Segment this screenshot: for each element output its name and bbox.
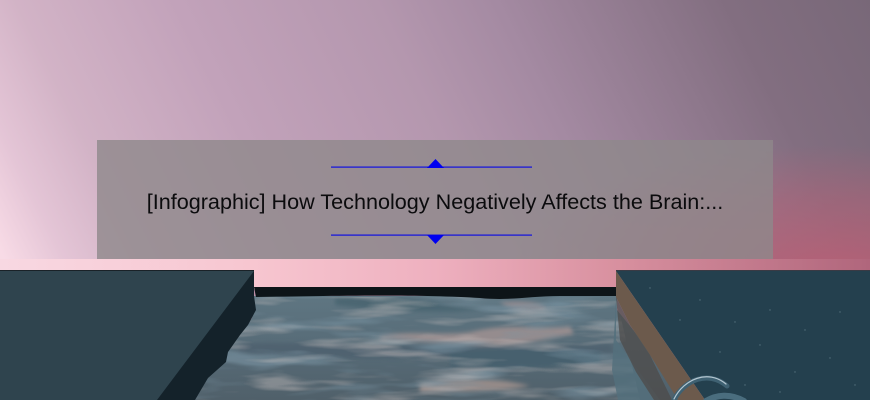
title: [Infographic] How Technology Negatively Affects the Brain:... [147, 189, 723, 214]
sky [0, 0, 870, 289]
right deck [616, 270, 870, 400]
water shade at right side [612, 300, 660, 400]
icon: pool ladder rails [674, 377, 744, 400]
pool water [190, 296, 690, 400]
back wall of pool [254, 287, 617, 299]
bottom divider with down arrow [331, 234, 532, 244]
left deck [0, 270, 256, 400]
title panel [97, 140, 773, 259]
top divider with up arrow [331, 159, 532, 168]
